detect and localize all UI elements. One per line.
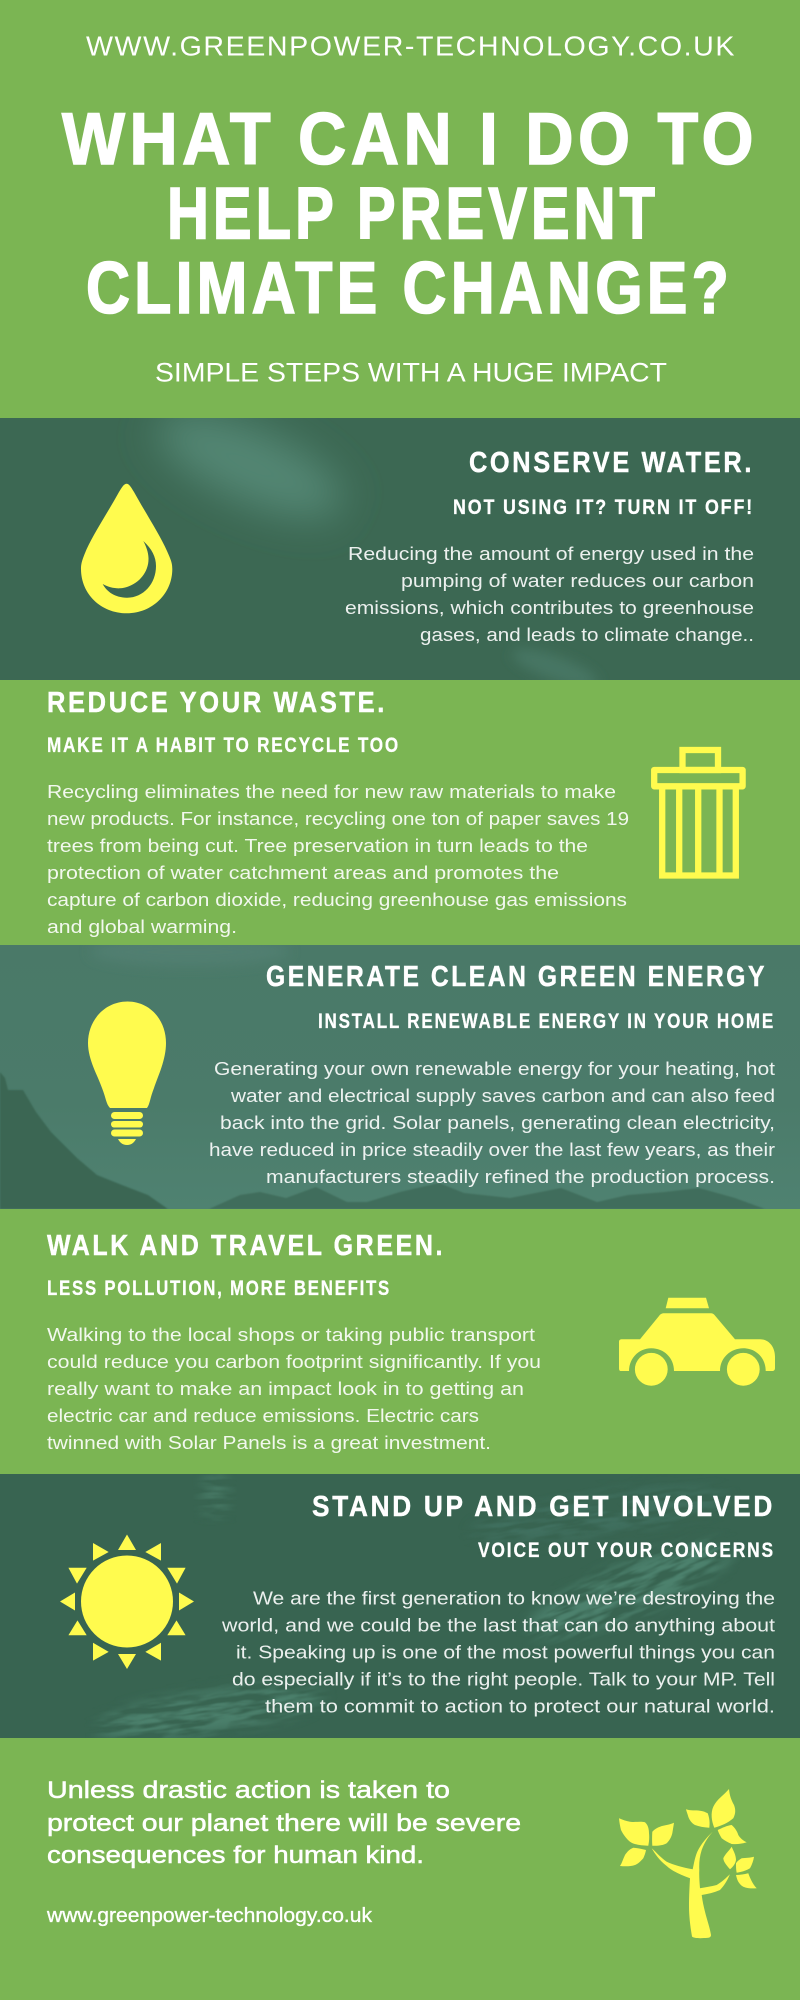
panel: reduce your waste — [0, 680, 800, 945]
body text — [345, 543, 754, 645]
subheading: MAKE IT A HABIT TO RECYCLE TOO — [47, 734, 400, 757]
body text: do especially if it’s to the right people. Talk to your MP. Tell — [232, 1668, 775, 1690]
icon: sun — [60, 1534, 194, 1669]
panel: walk and travel green — [0, 1209, 800, 1474]
body text — [209, 1058, 775, 1187]
body text: Reducing the amount of energy used in the — [348, 543, 754, 564]
body text: world, and we could be the last that can do anything about — [221, 1614, 775, 1636]
website link: www.greenpower-technology.co.uk — [46, 1905, 373, 1927]
body text: gases, and leads to climate change.. — [420, 624, 754, 645]
body text: really want to make an impact look in to getting an — [47, 1378, 524, 1399]
body text: Generating your own renewable energy for your heating, hot — [214, 1058, 775, 1079]
body text — [221, 1588, 775, 1716]
body text: twinned with Solar Panels is a great investment. — [47, 1432, 491, 1453]
icon: water drop — [81, 484, 172, 613]
heading: CONSERVE WATER. — [469, 447, 754, 479]
header — [62, 30, 758, 388]
body text: new products. For instance, recycling one ton of paper saves 19 — [47, 808, 629, 829]
body text: protection of water catchment areas and promotes the — [47, 862, 559, 883]
body text: it. Speaking up is one of the most powerful things you can — [236, 1642, 775, 1662]
closing statement: Unless drastic action is taken to — [47, 1777, 450, 1804]
panel: closing message — [0, 1738, 800, 2000]
body text: and global warming. — [47, 916, 237, 937]
body text: trees from being cut. Tree preservation in turn leads to the — [47, 835, 588, 856]
subheading: LESS POLLUTION, MORE BENEFITS — [47, 1277, 391, 1300]
panel: generate clean green energy — [0, 938, 800, 1209]
icon: trash bin — [654, 750, 743, 876]
icon: light bulb — [88, 1002, 166, 1145]
body text: electric car and reduce emissions. Electric cars — [47, 1405, 479, 1426]
body text: back into the grid. Solar panels, generating clean electricity, — [220, 1112, 775, 1133]
body text: have reduced in price steadily over the last few years, as their — [209, 1139, 775, 1160]
icon: tree — [619, 1789, 757, 1938]
body text: them to commit to action to protect our natural world. — [265, 1696, 775, 1716]
body text: We are the first generation to know we’re destroying the — [253, 1588, 775, 1608]
body text: Recycling eliminates the need for new raw materials to make — [47, 781, 616, 802]
closing statement: protect our planet there will be severe — [47, 1810, 521, 1837]
body text: capture of carbon dioxide, reducing greenhouse gas emissions — [47, 889, 627, 910]
title — [62, 99, 758, 329]
closing statement — [47, 1777, 521, 1869]
body text: emissions, which contributes to greenhouse — [345, 597, 754, 618]
heading: WALK AND TRAVEL GREEN. — [47, 1230, 445, 1262]
body text: pumping of water reduces our carbon — [401, 570, 754, 591]
closing statement: consequences for human kind. — [47, 1842, 424, 1869]
subheading: NOT USING IT? TURN IT OFF! — [453, 496, 754, 519]
body text: manufacturers steadily refined the production process. — [266, 1166, 775, 1187]
website address: WWW.GREENPOWER-TECHNOLOGY.CO.UK — [86, 30, 736, 62]
body text: Walking to the local shops or taking public transport — [47, 1324, 535, 1345]
body text — [47, 781, 629, 937]
title: HELP PREVENT — [167, 174, 659, 254]
panel: stand up and get involved — [0, 1471, 800, 1748]
heading: REDUCE YOUR WASTE. — [47, 687, 387, 719]
panel: conserve water — [0, 418, 800, 680]
icon: taxi — [619, 1298, 775, 1386]
body text — [47, 1324, 541, 1453]
subtitle: SIMPLE STEPS WITH A HUGE IMPACT — [155, 358, 667, 388]
body text: water and electrical supply saves carbon and can also feed — [230, 1085, 775, 1106]
body text: could reduce you carbon footprint significantly. If you — [47, 1351, 541, 1372]
